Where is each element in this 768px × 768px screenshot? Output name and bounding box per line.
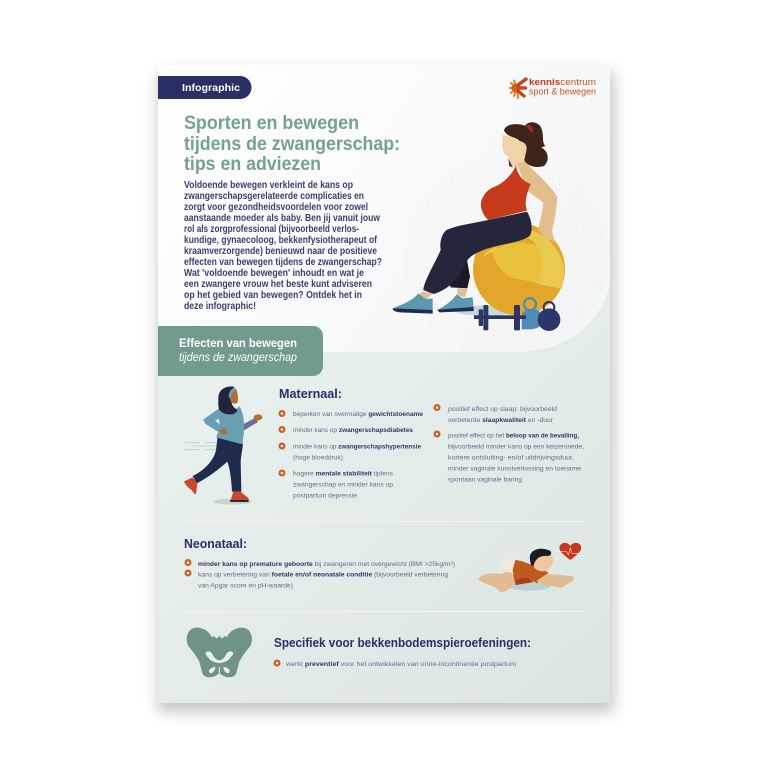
list: maternal effects, left column: zwangerschap en minder kans op (293, 482, 393, 488)
exercise ball (473, 223, 565, 315)
list: maternal effects, right column: verbeterde slaapkwaliteit en -duur (448, 417, 554, 424)
section tab: Effecten van bewegen: tijdens de zwangerschap (179, 352, 298, 364)
list: maternal effects, left column: minder kans op zwangerschapshypertensie (293, 444, 421, 450)
list: neonatal effects: van Apgar score en pH-waarde) (198, 582, 293, 590)
woman (393, 122, 557, 314)
intro text: Wat 'voldoende bewegen' inhoudt en wat je (184, 268, 364, 279)
intro text: effecten van bewegen tijdens de zwangerschap? (184, 257, 382, 268)
list: maternal effects, right column: positief effect op het beloop van de bevalling, (448, 432, 579, 440)
intro text: aanstaande moeder als baby. Ben jij vanuit jouw (184, 213, 380, 224)
illustration: crawling baby with heart (478, 543, 581, 592)
heading: Specifiek voor bekkenbodemspieroefeningen: Specifiek voor bekkenbodemspieroefeningen: (274, 636, 531, 650)
intro text: een zwangere vrouw het beste kunt adviseren (184, 279, 372, 290)
list: maternal effects, left column (280, 411, 423, 500)
icon: pelvis (187, 628, 252, 677)
title (184, 112, 400, 175)
list: maternal effects, right column: kortere ontsluiting- en/of uitdrijvingsduur, (448, 454, 574, 462)
list: maternal effects, right column: spontaan vaginale baring (448, 476, 522, 484)
list: maternal effects, left column: postpartum depressie (293, 492, 357, 500)
intro text: rol als zorgprofessional (bijvoorbeeld verlos- (184, 224, 359, 235)
list: neonatal effects: kans op verbetering van foetale en/of neonatale conditie (bijvoorbeeld verbetering (198, 572, 448, 578)
page shadow (158, 72, 614, 712)
section tab: Effecten van bewegen: Effecten van bewegen (179, 338, 297, 350)
list: maternal effects, left column: minder kans op zwangerschapsdiabetes (293, 427, 413, 434)
list: neonatal effects: minder kans op premature geboorte bij zwangeren met overgewicht (BMI >25kg/m²) (198, 561, 455, 568)
header tag: Infographic: Infographic (182, 82, 240, 94)
intro text: Voldoende bewegen verkleint de kans op (184, 180, 353, 191)
illustration: pregnant woman on exercise ball (393, 122, 565, 331)
intro text: deze infographic! (184, 301, 256, 312)
intro text: op het gebied van bewegen? Ontdek het in (184, 290, 362, 301)
title: tips en adviezen (184, 153, 321, 175)
intro text: kraamverzorgende) benieuwd naar de positieve (184, 246, 377, 257)
list: maternal effects, right column (435, 405, 584, 484)
intro text (184, 180, 382, 312)
heading: Neonataal: Neonataal: (184, 537, 247, 551)
title: Sporten en bewegen (184, 112, 359, 134)
logo: kenniscentrum sport & bewegen: sport & bewegen (529, 86, 596, 98)
heading: Maternaal: Maternaal: (279, 387, 342, 401)
intro text: zwangerschapsgerelateerde complicaties en (184, 191, 364, 202)
logo: kenniscentrum sport & bewegen: kenniscentrum (529, 77, 596, 88)
intro text: zorgt voor gezondheidsvoordelen voor zowel (184, 202, 368, 213)
title: tijdens de zwangerschap: (184, 133, 400, 155)
list: maternal effects, left column: (hoge bloeddruk) (293, 454, 343, 462)
kettlebells and dumbbell (474, 298, 560, 331)
infographic sheet (158, 65, 610, 703)
intro text: kundige, gynaecoloog, bekkenfysiotherapeut of (184, 235, 378, 246)
list: maternal effects, left column: beperken van overmatige gewichtstoename (293, 411, 423, 418)
logo: kenniscentrum sport & bewegen (510, 77, 596, 98)
list: neonatal effects (186, 560, 455, 590)
list: maternal effects, left column: hogere mentale stabiliteit tijdens (293, 470, 394, 478)
list: maternal effects, right column: positief effect op slaap: bijvoorbeeld (448, 406, 557, 413)
list: pelvic floor effect: werkt preventief voor het ontwikkelen van urine-incontinentie postpartum (285, 661, 516, 668)
header tag: Infographic (158, 76, 252, 99)
illustration: running woman (183, 387, 262, 505)
list: maternal effects, right column: bijvoorbeeld minder kans op een keizersnede, (448, 444, 584, 450)
list: maternal effects, right column: minder vaginale kunstverlossing en toename (448, 466, 581, 472)
section tab: Effecten van bewegen (158, 326, 323, 376)
